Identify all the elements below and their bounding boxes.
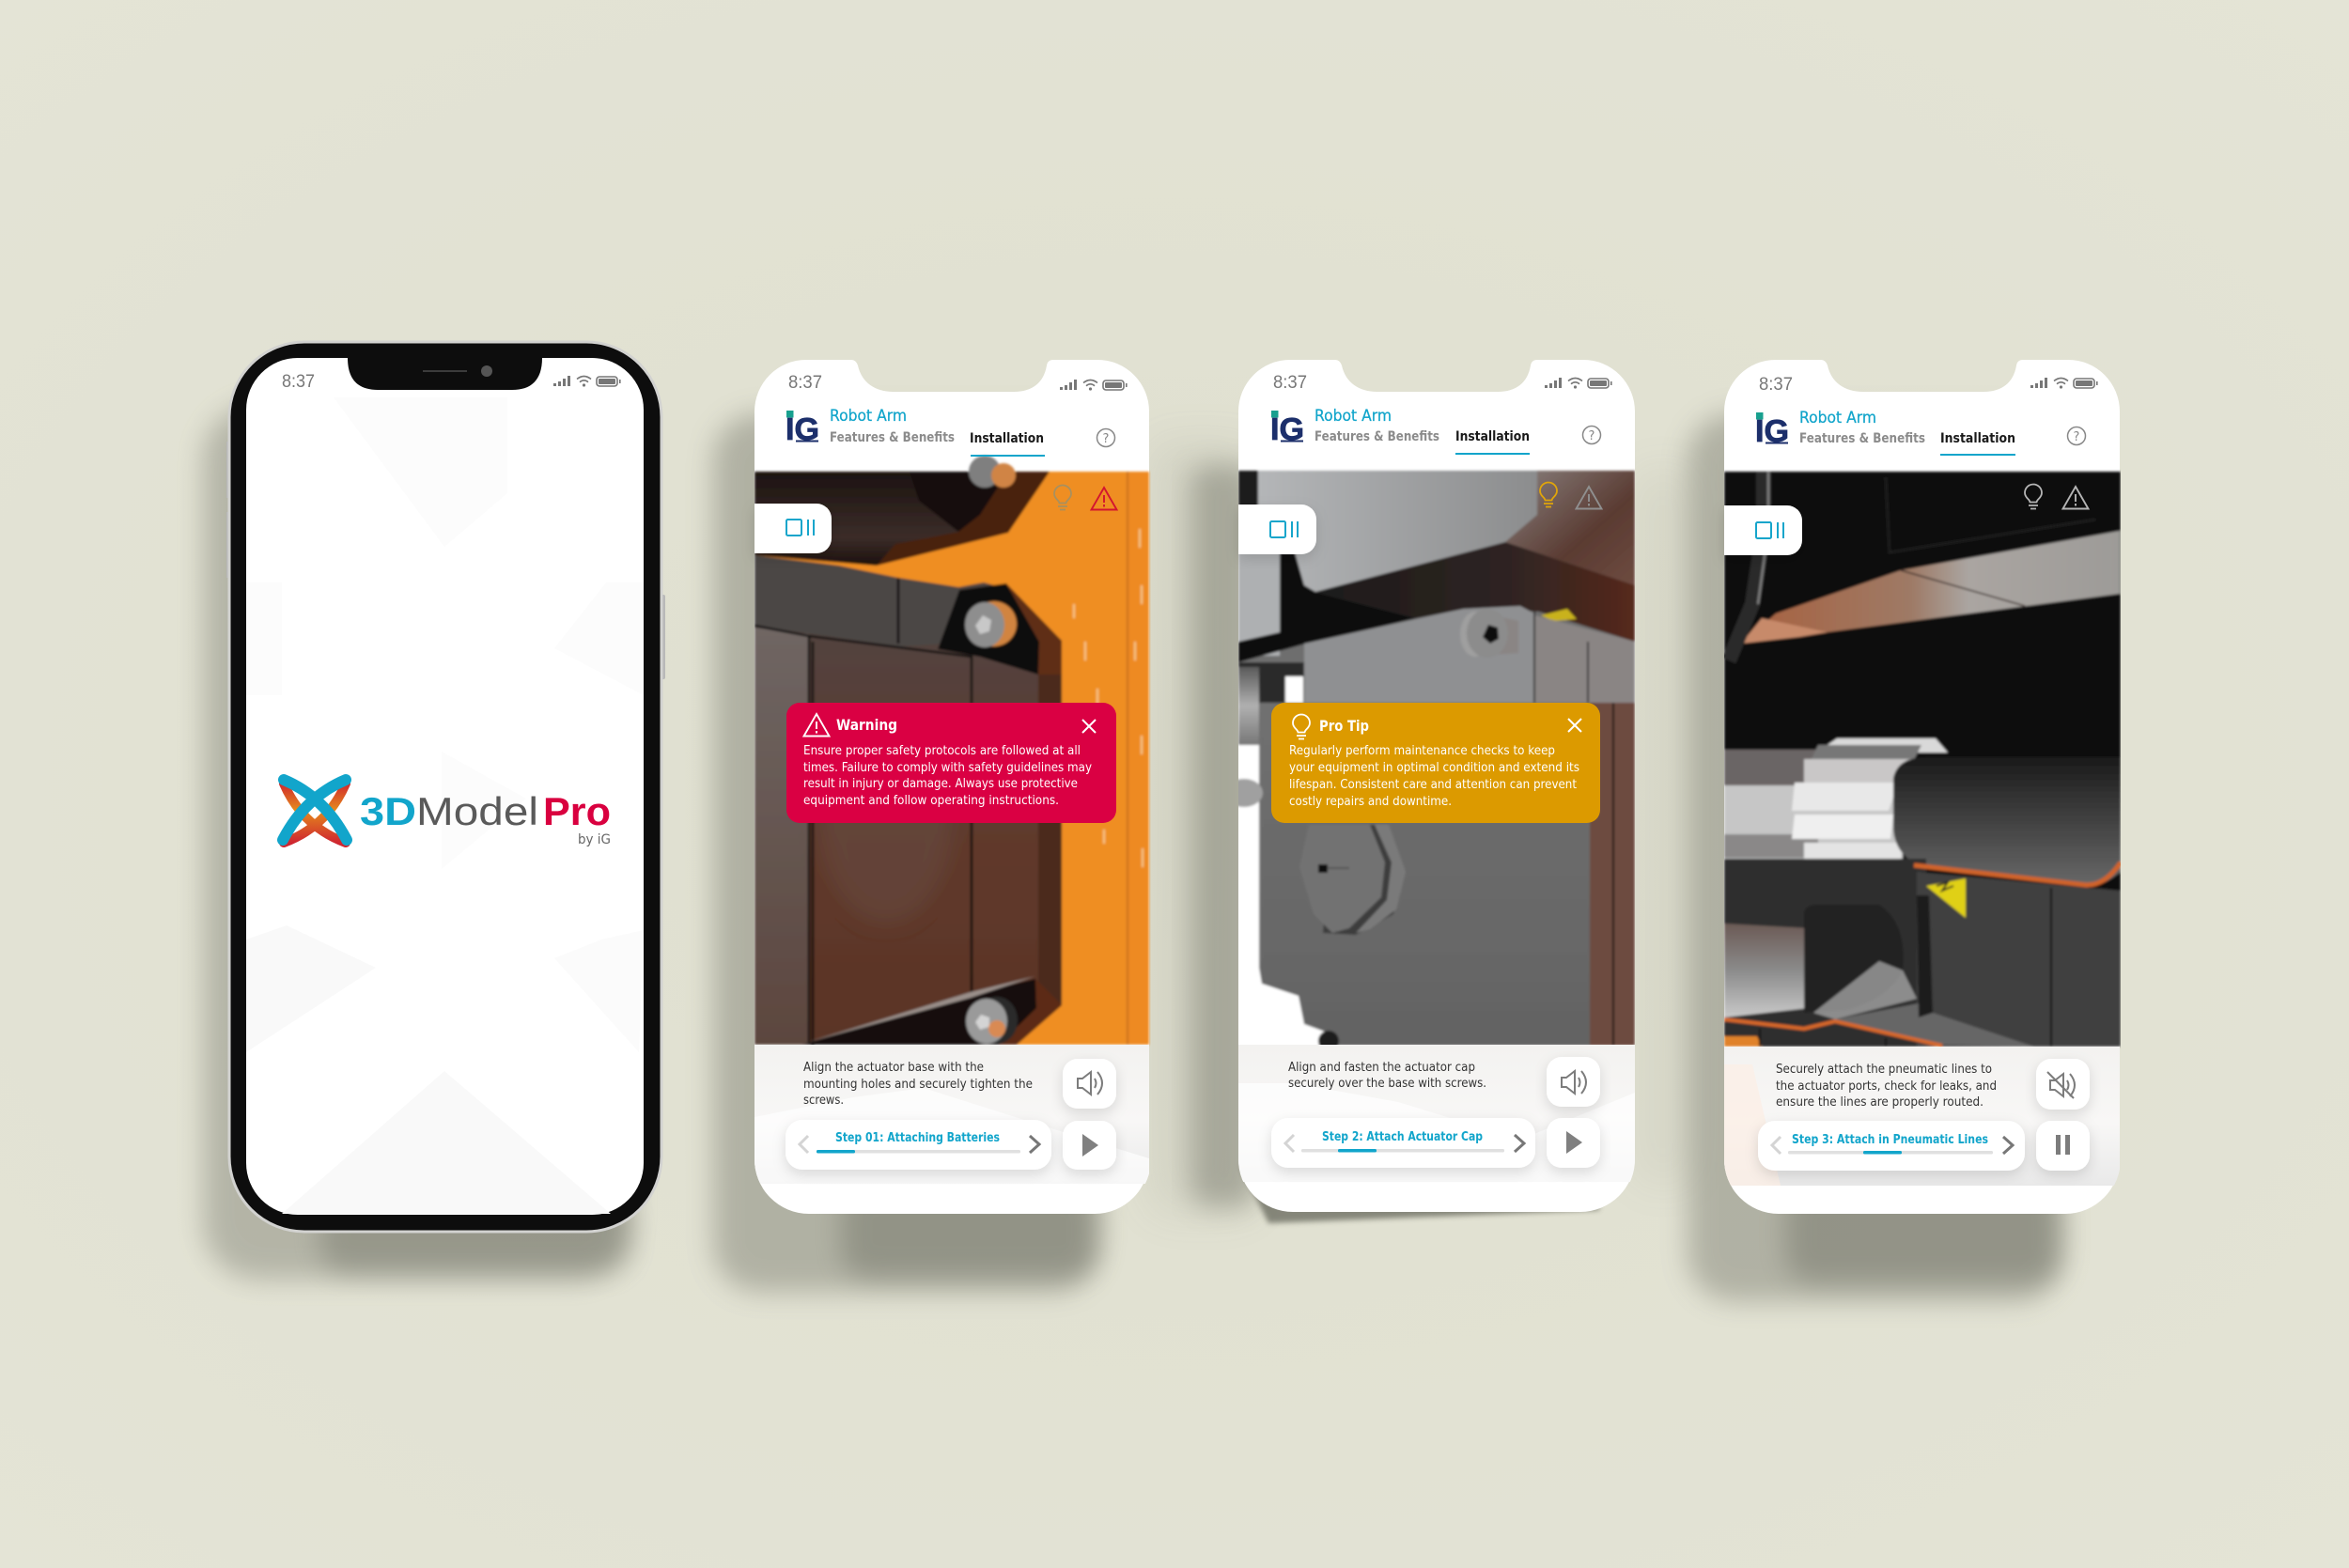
icon: pro tip bulb <box>2025 485 2042 509</box>
tab: features and benefits: Features & Benefits <box>1799 431 1925 446</box>
step description: ensure the lines are properly routed. <box>1776 1094 1983 1110</box>
tab: installation: Installation <box>970 431 1044 446</box>
top status bar <box>1273 373 1612 393</box>
step title: Step 3: Attach in Pneumatic Lines <box>1792 1133 1988 1147</box>
title: Robot Arm <box>830 407 907 426</box>
pro tip text: Regularly perform maintenance checks to keep <box>1289 743 1555 758</box>
warning text <box>803 743 1092 808</box>
warning text: Ensure proper safety protocols are followed at all <box>803 743 1081 758</box>
tab: installation: Installation <box>1940 431 2015 446</box>
pro tip text: costly repairs and downtime. <box>1289 794 1452 809</box>
sound button <box>1063 1059 1116 1109</box>
help icon <box>1097 428 1114 447</box>
step description: screws. <box>803 1093 844 1108</box>
active tab underline <box>1940 454 2015 456</box>
top status bar: 8:37 <box>788 373 822 393</box>
logo wordmark: Model <box>416 789 538 833</box>
iG logo: IG <box>1270 411 1304 446</box>
step description: securely over the base with screws. <box>1288 1076 1486 1091</box>
icon: warning triangle <box>1577 487 1601 509</box>
progress bar <box>1788 1151 1993 1154</box>
step title: Step 01: Attaching Batteries <box>835 1131 1000 1145</box>
3D view: actuator cap <box>1225 471 1635 1051</box>
phone 2 shadow <box>713 413 1099 1292</box>
help icon: ? <box>1589 429 1595 443</box>
notch with speaker and camera <box>348 358 542 390</box>
3D view: actuator base on orange arm <box>754 456 1149 1046</box>
icon: warning triangle <box>1092 488 1116 509</box>
active tab underline <box>971 455 1045 457</box>
phone 3: pro tip screen <box>1225 360 1635 1212</box>
app header <box>1270 407 1601 455</box>
pro tip text: lifespan. Consistent care and attention can prevent <box>1289 777 1577 792</box>
phone 1: splash screen <box>226 342 665 1232</box>
next arrow <box>2003 1137 2013 1154</box>
3D view: pneumatic lines <box>1724 472 2121 1047</box>
step description: mounting holes and securely tighten the <box>803 1077 1033 1092</box>
warning icon <box>804 714 829 737</box>
logo wordmark: Pro <box>543 789 611 833</box>
iG logo: IG <box>786 411 819 446</box>
help icon: ? <box>1103 432 1109 446</box>
bottom control panel <box>1238 1045 1635 1182</box>
warning text: times. Failure to comply with safety guidelines may <box>803 760 1092 775</box>
app header <box>786 407 1114 457</box>
top status bar: 8:37 <box>1759 375 1793 395</box>
phone body <box>1724 360 2120 1214</box>
logo: 3DModelPro by iG <box>283 780 611 847</box>
step description: the actuator ports, check for leaks, and <box>1776 1079 1997 1094</box>
play button <box>1547 1118 1600 1168</box>
pause button <box>2036 1121 2090 1171</box>
progress bar <box>817 1150 1020 1154</box>
phone body <box>754 360 1149 1214</box>
pro tip icon <box>1293 714 1310 738</box>
step description <box>1288 1060 1486 1091</box>
phone body <box>1238 360 1635 1212</box>
side panel toggle <box>754 504 832 553</box>
close icon <box>1082 720 1096 733</box>
iG logo: IG <box>1755 413 1789 448</box>
step description: Align the actuator base with the <box>803 1060 984 1075</box>
step navigator <box>1271 1118 1535 1168</box>
step title: Step 2: Attach Actuator Cap <box>1322 1130 1483 1144</box>
side panel toggle <box>1724 505 1802 555</box>
next arrow <box>1030 1136 1039 1153</box>
progress bar <box>1301 1149 1504 1152</box>
close icon <box>1568 719 1581 732</box>
step description: Align and fasten the actuator cap <box>1288 1060 1475 1075</box>
step description <box>1776 1062 1997 1110</box>
title: Robot Arm <box>1799 409 1876 427</box>
icon: pro tip bulb <box>1540 483 1557 507</box>
side panel toggle <box>1238 505 1316 554</box>
warning text: result in injury or damage. Always use protective <box>803 776 1078 791</box>
phone 2: warning screen <box>754 360 1149 1214</box>
phone 4 shadow <box>1688 413 2063 1301</box>
mockup scene: four phones on a beige background <box>192 340 2121 1313</box>
icon: warning triangle <box>2063 487 2088 509</box>
phone 4: pneumatic lines screen <box>1724 360 2121 1214</box>
splash screen <box>246 358 644 1215</box>
logo mark <box>283 780 347 843</box>
logo wordmark <box>360 789 611 833</box>
warning title: Warning <box>836 716 897 734</box>
muted sound button <box>2036 1059 2090 1110</box>
top status bar <box>788 373 1128 393</box>
title: Robot Arm <box>1315 407 1392 426</box>
pro tip text <box>1289 743 1579 809</box>
status bar icons <box>553 376 621 387</box>
step navigator <box>1758 1121 2025 1171</box>
step description: Securely attach the pneumatic lines to <box>1776 1062 1992 1077</box>
help icon: ? <box>2074 430 2079 444</box>
next arrow <box>1515 1135 1524 1152</box>
help icon <box>2067 427 2086 445</box>
icon: pro tip bulb <box>1054 485 1071 509</box>
top status bar <box>1759 375 2098 395</box>
bottom control panel <box>754 1045 1149 1184</box>
phone 3 shadow <box>1151 442 1691 1223</box>
play button <box>1063 1121 1116 1170</box>
step description <box>803 1060 1033 1108</box>
bottom control panel <box>1724 1047 2120 1186</box>
warning callout <box>786 703 1116 823</box>
logo byline: by iG <box>578 832 611 847</box>
app header <box>1755 409 2086 456</box>
previous arrow <box>1772 1137 1781 1154</box>
step navigator <box>786 1120 1051 1170</box>
status bar time: 8:37 <box>282 372 315 392</box>
active tab underline <box>1455 453 1530 455</box>
previous arrow <box>1285 1135 1294 1152</box>
phone frame <box>226 342 665 1232</box>
phone 1 shadow <box>203 404 631 1280</box>
tab: features and benefits: Features & Benefits <box>830 430 955 445</box>
pro tip title: Pro Tip <box>1319 717 1369 735</box>
help icon <box>1582 427 1601 443</box>
tab: features and benefits: Features & Benefits <box>1315 429 1439 444</box>
tab: installation: Installation <box>1455 429 1530 444</box>
warning text: equipment and follow operating instructions. <box>803 793 1059 808</box>
sound button <box>1547 1057 1600 1107</box>
pro tip text: your equipment in optimal condition and extend its <box>1289 760 1579 775</box>
pro tip callout <box>1271 703 1600 823</box>
top status bar: 8:37 <box>1273 373 1307 393</box>
logo wordmark: 3D <box>360 789 416 833</box>
previous arrow <box>800 1136 808 1153</box>
